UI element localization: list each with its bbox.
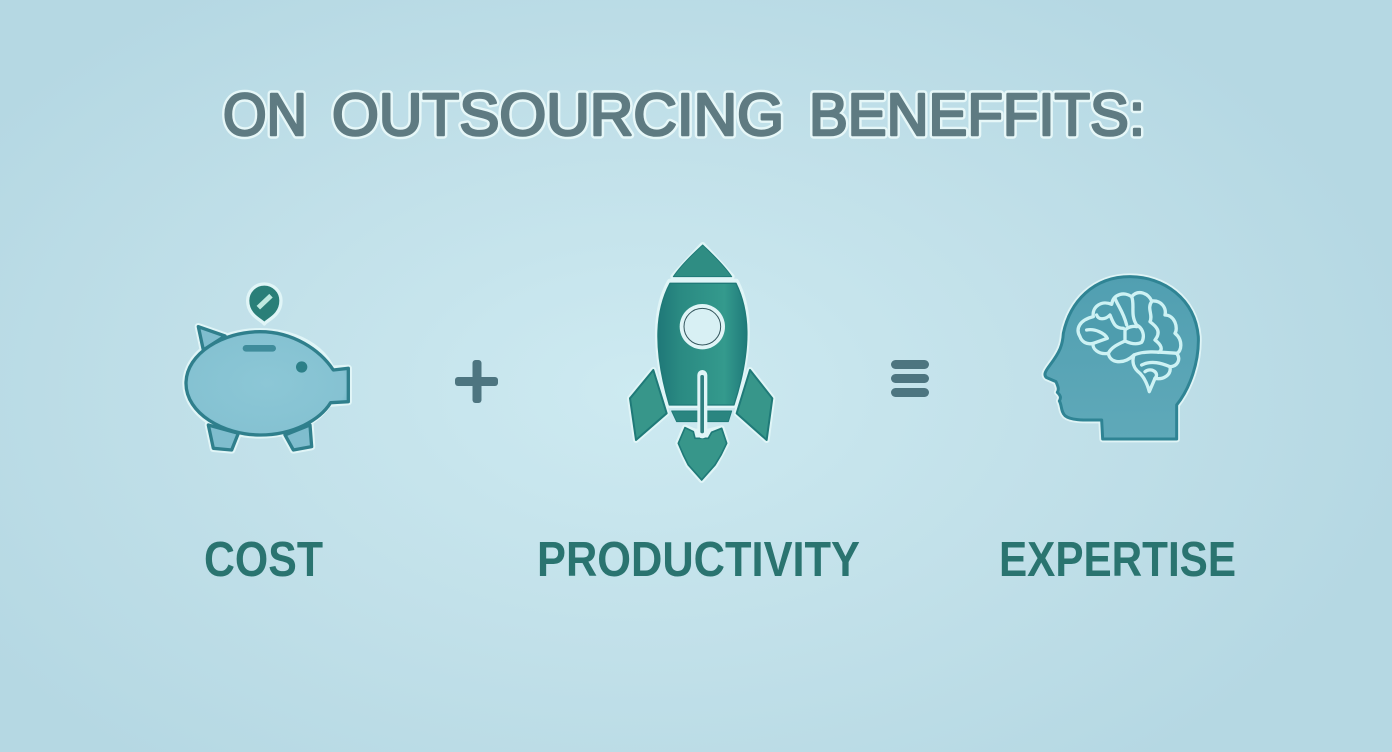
title: OUTSOURCING — [332, 82, 784, 148]
left fin — [630, 370, 667, 440]
title: ON — [223, 82, 307, 148]
label: expertise: EXPERTISE — [999, 533, 1236, 587]
plus sign — [455, 360, 498, 403]
icon: piggy bank — [186, 284, 348, 450]
center fin — [697, 370, 707, 438]
coin — [248, 284, 281, 324]
title: BENEFFITS: — [809, 82, 1145, 148]
rocket glow — [630, 245, 772, 480]
icon: head with brain — [1045, 277, 1198, 439]
pig body and snout — [186, 332, 348, 435]
equals sign — [891, 360, 929, 397]
label: productivity: PRODUCTIVITY — [537, 533, 860, 587]
title: ON — [223, 82, 307, 148]
icon: rocket — [630, 245, 772, 480]
coin slot — [243, 345, 276, 352]
label: cost: COST — [204, 533, 323, 587]
rocket lower band — [672, 411, 732, 422]
title: BENEFFITS: — [809, 82, 1145, 148]
brain — [1078, 293, 1181, 392]
title: OUTSOURCING — [332, 82, 784, 148]
right fin — [737, 370, 772, 440]
pig ear and legs — [198, 327, 312, 450]
rocket nose — [673, 245, 732, 277]
rocket body — [658, 283, 747, 405]
window — [680, 304, 725, 349]
pig outline glow — [186, 327, 348, 450]
pig eye — [296, 361, 307, 373]
head silhouette — [1045, 277, 1198, 439]
flame — [678, 428, 727, 480]
title — [223, 82, 1145, 148]
